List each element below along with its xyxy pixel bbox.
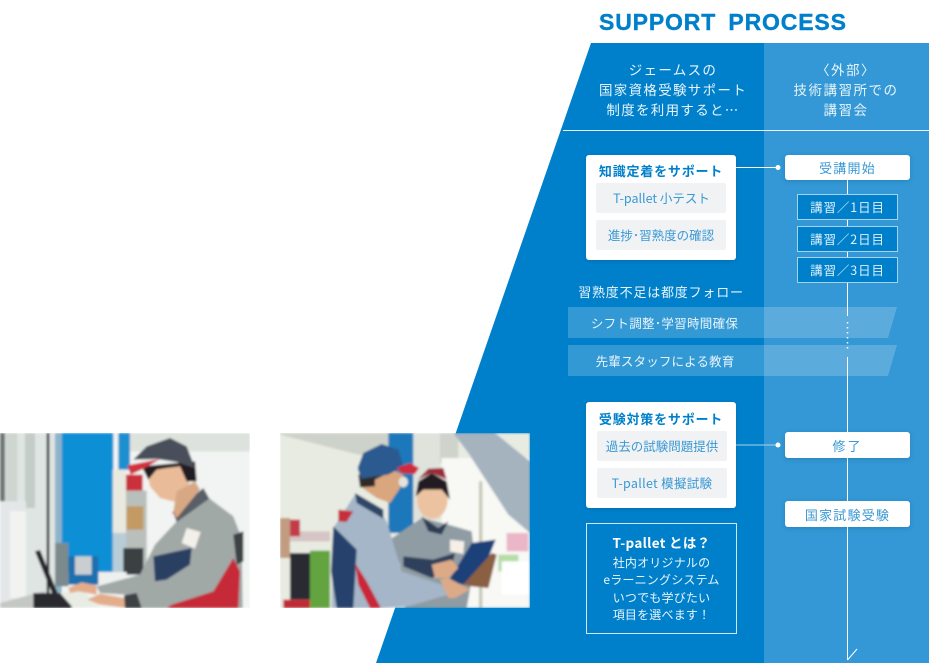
panel: exam support [586,402,736,508]
step: national exam [785,501,910,527]
band: senior staff education: 先輩スタッフによる教育 [596,351,734,370]
callout: what is T-pallet [586,523,737,634]
item: past exam questions: 過去の試験問題提供 [606,436,718,455]
panel: knowledge support [586,155,736,260]
item: T-pallet mock exam [597,468,727,498]
item: T-pallet quiz: T-pallet 小テスト [613,188,710,207]
connector: exam support to completion [736,442,780,448]
photo: mechanic typing at a computer [0,433,250,608]
callout heading: T-pallet とは？ [613,532,710,552]
body [97,496,243,608]
column heading: external course [794,59,898,119]
left mechanic head [358,468,403,503]
photo: two mechanics with a clipboard [280,433,530,608]
column heading: external course: 〈外部〉 [816,59,876,79]
clipboard [448,540,496,585]
step: day 3 [797,257,898,283]
callout body [603,554,720,623]
title: SUPPORT PROCESS [599,9,847,35]
band: shift adjustment [568,307,897,338]
right mechanic body [390,518,475,608]
column heading: James support: 制度を利用すると… [606,99,740,119]
step: national exam: 国家試験受験 [805,505,890,524]
callout body: eラーニングシステム [603,571,720,588]
step: course start: 受講開始 [819,158,876,177]
callout body: 項目を選べます！ [613,606,710,623]
step: completion: 修了 [832,436,862,455]
item: progress check [596,220,726,250]
step: day 1: 講習／1日目 [810,197,885,216]
step: day 2: 講習／2日目 [810,229,885,248]
band: senior staff education [568,345,897,376]
step: day 2 [797,226,898,252]
head [147,461,190,502]
timeline line with arrow [846,180,858,660]
column heading: external course: 技術講習所での [794,79,898,99]
heading: knowledge support: 知識定着をサポート [599,161,723,180]
arms and hands [68,582,97,595]
column heading: James support: ジェームスの [629,59,717,79]
step: day 1 [797,194,898,220]
left mechanic body [332,495,448,608]
column heading: James support [599,59,747,119]
connector: knowledge support to course start [736,165,780,170]
column heading: external course: 講習会 [824,99,868,119]
band: shift adjustment: シフト調整･学習時間確保 [591,313,738,332]
step: completion [785,432,910,458]
heading: exam support: 受験対策をサポート [599,409,723,428]
column heading: James support: 国家資格受験サポート [599,79,747,99]
callout body: 社内オリジナルの [613,554,710,571]
callout body: いつでも学びたい [613,589,710,606]
item: T-pallet quiz [596,183,726,213]
follow-up heading: 習熟度不足は都度フォロー [578,282,744,301]
step: course start [785,155,910,180]
item: T-pallet mock exam: T-pallet 模擬試験 [612,473,712,492]
right mechanic head [417,480,448,519]
item: past exam questions [597,431,727,461]
item: progress check: 進捗･習熟度の確認 [608,225,714,244]
step: day 3: 講習／3日目 [810,260,885,279]
